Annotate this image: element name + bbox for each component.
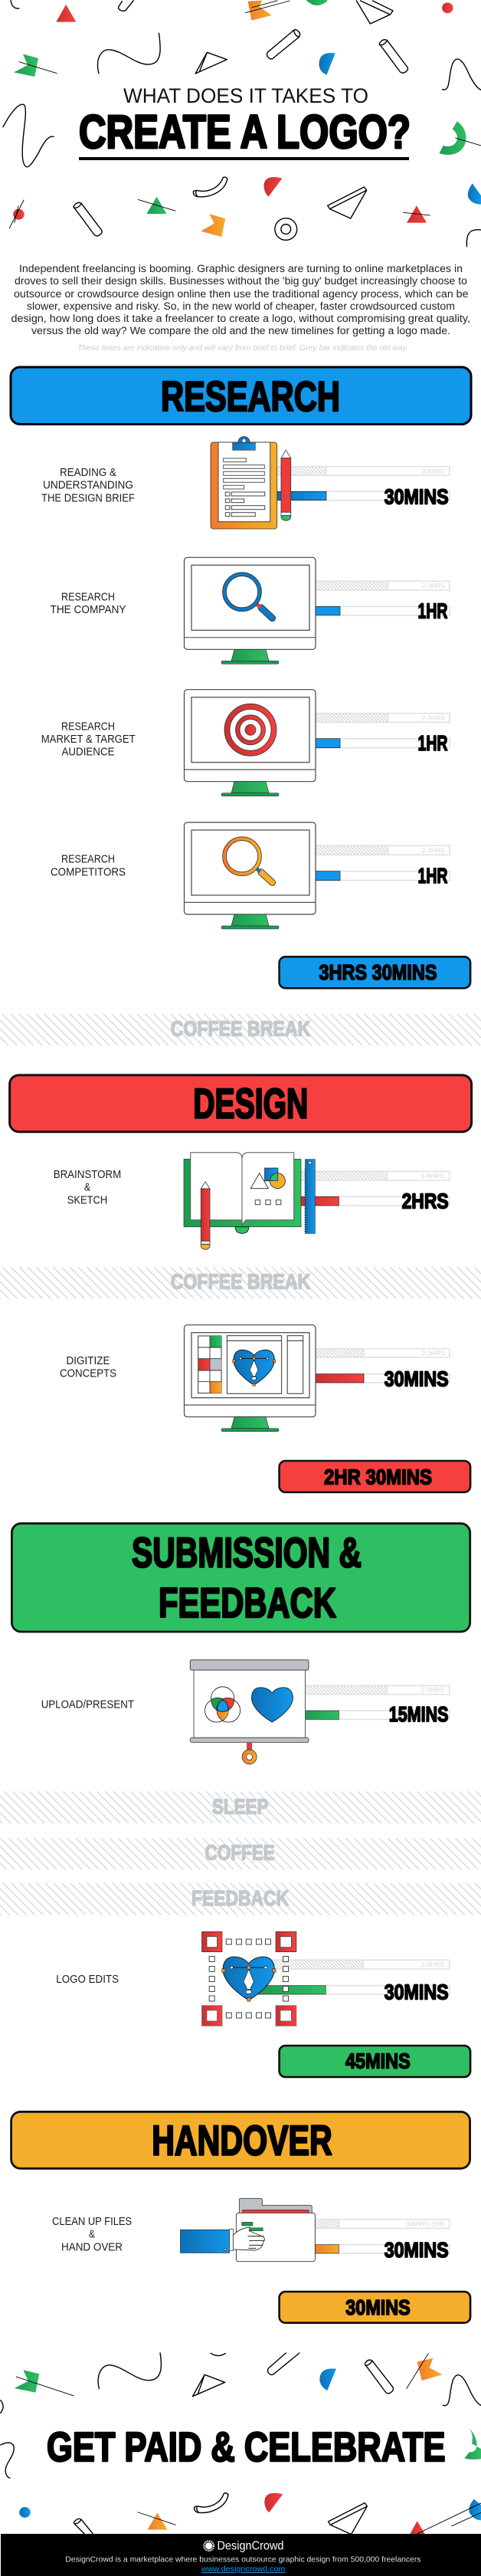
label: MARKET & TARGET [41, 733, 136, 746]
old timeline bar: 30MINS [421, 468, 445, 475]
label: RESEARCH [61, 720, 115, 733]
old timeline bar [316, 581, 450, 590]
new timeline bar [276, 484, 450, 508]
break band: sleep: SLEEP [212, 1795, 268, 1819]
new timeline bar [316, 599, 450, 623]
new timeline bar: 15MINS [389, 1702, 449, 1726]
label: CONCEPTS [60, 1367, 116, 1380]
label: HAND OVER [61, 2241, 123, 2254]
small handle squares [209, 1939, 271, 2018]
logo wordmark: DesignCrowd [218, 2540, 283, 2553]
corner handles [202, 1931, 296, 2026]
break band: coffee break [0, 1267, 481, 1299]
total: research [280, 957, 470, 988]
title underline [79, 157, 409, 160]
label: READING & [60, 466, 116, 479]
total: submission: 45MINS [345, 2049, 411, 2073]
section banner: submission and feedback: SUBMISSION & [132, 1528, 362, 1576]
row: brainstorm and sketch [54, 1153, 450, 1249]
old timeline bar: 2-3HRS [422, 1349, 445, 1357]
old timeline bar [316, 1349, 450, 1357]
section banner: design: DESIGN [193, 1079, 308, 1127]
label: THE COMPANY [51, 603, 126, 616]
label [41, 720, 136, 759]
total: research: 3HRS 30MINS [319, 960, 437, 984]
title line: what does it takes to: WHAT DOES IT TAKES TO [123, 84, 368, 107]
label [41, 466, 135, 504]
row: logo edits [56, 1931, 450, 2026]
new timeline bar [316, 731, 450, 755]
section banner: design [10, 1075, 472, 1132]
section banner: handover: HANDOVER [152, 2117, 332, 2164]
total: design [280, 1461, 470, 1492]
label: CLEAN UP FILES [52, 2215, 132, 2228]
row: research competitors [51, 822, 450, 929]
old timeline bar: 2-3HRS [422, 714, 445, 721]
icon: projector screen [190, 1660, 309, 1764]
label: RESEARCH [61, 853, 115, 866]
intro paragraph: droves to sell their design skills. Businesses without the 'big guy' budget increasingly choose to [15, 275, 467, 287]
old timeline bar: 2-3HRS [421, 1961, 444, 1968]
old timeline bar [305, 1685, 450, 1695]
new timeline bar: 30MINS [384, 484, 449, 508]
icon: designcrowd logo mark [204, 2541, 214, 2551]
canvas panel [227, 1336, 282, 1393]
label: THE DESIGN BRIEF [41, 491, 135, 504]
new timeline bar: 30MINS [384, 1980, 449, 2003]
new timeline bar: 30MINS [384, 2238, 449, 2262]
old timeline bar: 2-3HRS [422, 582, 445, 589]
decorative confetti shapes: top [3, 0, 481, 247]
label: RESEARCH [61, 590, 115, 603]
new timeline bar [301, 1190, 450, 1213]
label: DIGITIZE [66, 1354, 110, 1367]
intro paragraph: outsource or crowdsource design online then use the traditional agency process, which can be [14, 288, 469, 300]
title [79, 84, 411, 160]
heart logo with pen tool [222, 1957, 276, 2001]
new timeline bar [305, 1702, 450, 1726]
intro paragraph: slower, expensive and risky. So, in the new world of cheaper, faster crowdsourced custom [27, 300, 455, 312]
note: These times are indicative only and will vary from brief to brief. Grey bar indicates the old way. [77, 344, 408, 353]
icon: ruler [305, 1160, 315, 1233]
row: reading the brief [41, 437, 450, 529]
title line: create a logo: CREATE A LOGO? [79, 106, 411, 158]
label: COMPETITORS [51, 865, 126, 878]
label [51, 853, 126, 878]
break band: coffee break: COFFEE BREAK [171, 1270, 310, 1294]
label: UPLOAD/PRESENT [41, 1698, 134, 1711]
label: UNDERSTANDING [43, 479, 133, 492]
section banner: submission and feedback [11, 1524, 470, 1632]
icon: pencil [281, 450, 291, 520]
icon: monitor with design software [184, 1325, 316, 1432]
icon: folder [236, 2198, 315, 2262]
section banner: handover [11, 2112, 470, 2168]
intro paragraph: Independent freelancing is booming. Graphic designers are turning to online marketplaces in [19, 263, 463, 274]
break band: coffee [0, 1838, 481, 1869]
intro paragraph [11, 263, 470, 336]
old timeline bar [300, 1171, 450, 1180]
new timeline bar: 1HR [418, 864, 447, 888]
old timeline bar: 2-3HRS [421, 1686, 444, 1694]
break band: feedback [0, 1883, 481, 1915]
decorative confetti shapes: bottom [1, 2353, 481, 2535]
old timeline bar [316, 845, 450, 855]
old timeline bar [315, 2220, 450, 2228]
break band: feedback: FEEDBACK [191, 1886, 289, 1910]
label [51, 590, 126, 616]
new timeline bar: 2HRS [402, 1190, 449, 1213]
icon: sketch pencil [201, 1182, 210, 1249]
new timeline bar [316, 864, 450, 888]
icon: monitor with target [184, 690, 316, 796]
label: & [89, 2228, 95, 2241]
side panel [287, 1336, 303, 1393]
label: SKETCH [67, 1194, 107, 1207]
old timeline bar [268, 1960, 450, 1969]
total: design: 2HR 30MINS [324, 1465, 432, 1489]
icon: sketch book [184, 1153, 301, 1233]
footer [1, 2534, 481, 2576]
new timeline bar: 30MINS [384, 1367, 449, 1391]
old timeline bar: 30MINS-1HR [406, 2220, 444, 2227]
row: clean up files and hand over [52, 2198, 450, 2262]
colour palette [198, 1336, 221, 1393]
new timeline bar [257, 1980, 450, 2003]
heart logo with pen tool [233, 1350, 276, 1386]
intro paragraph: versus the old way? We compare the old and the new timelines for getting a logo made. [31, 325, 450, 336]
old timeline bar [276, 467, 450, 475]
icon: clipboard [211, 437, 277, 529]
label [60, 1354, 116, 1380]
total: handover [280, 2292, 470, 2323]
row: research the company [51, 557, 450, 664]
icon: selection box with heart [202, 1931, 296, 2026]
break band: sleep [0, 1791, 481, 1823]
break band: coffee: COFFEE [205, 1841, 275, 1865]
label: AUDIENCE [61, 746, 115, 759]
right handle squares [283, 1956, 288, 2001]
new timeline bar: 1HR [418, 731, 447, 755]
icon: monitor with orange magnifier [184, 822, 316, 929]
total: handover: 30MINS [345, 2295, 411, 2319]
big blue heart [251, 1688, 293, 1722]
intro paragraph: design, how long does it take a freelancer to create a logo, without compromising great quality, [11, 313, 470, 324]
new timeline bar: 1HR [418, 599, 447, 623]
total: submission [280, 2046, 470, 2077]
label [52, 2215, 132, 2254]
label: BRAINSTORM [54, 1168, 121, 1181]
row: upload and present [41, 1660, 450, 1764]
old timeline bar: 2-3HRS [422, 846, 445, 854]
section banner: research: RESEARCH [161, 372, 340, 420]
break band: coffee break: COFFEE BREAK [171, 1017, 310, 1041]
footer tagline: DesignCrowd is a marketplace where businesses outsource graphic design from 500,000 freelancers [65, 2555, 421, 2564]
old timeline bar [316, 714, 450, 722]
new timeline bar [316, 1367, 450, 1391]
row: research market and target audience [41, 690, 450, 796]
label: LOGO EDITS [56, 1973, 119, 1986]
section banner: research [11, 367, 471, 425]
icon: monitor with magnifier [184, 557, 316, 664]
label: & [84, 1181, 90, 1194]
row: digitize concepts [60, 1325, 450, 1432]
section banner: submission and feedback: FEEDBACK [159, 1579, 336, 1626]
label [54, 1168, 121, 1207]
new timeline bar [315, 2238, 450, 2262]
icon: hand with sleeve [180, 2227, 264, 2253]
break band: coffee break [0, 1014, 481, 1045]
venn diagram [205, 1687, 240, 1722]
old timeline bar: 5-8HRS [421, 1172, 444, 1180]
footer link: www.designcrowd.com [201, 2565, 286, 2574]
